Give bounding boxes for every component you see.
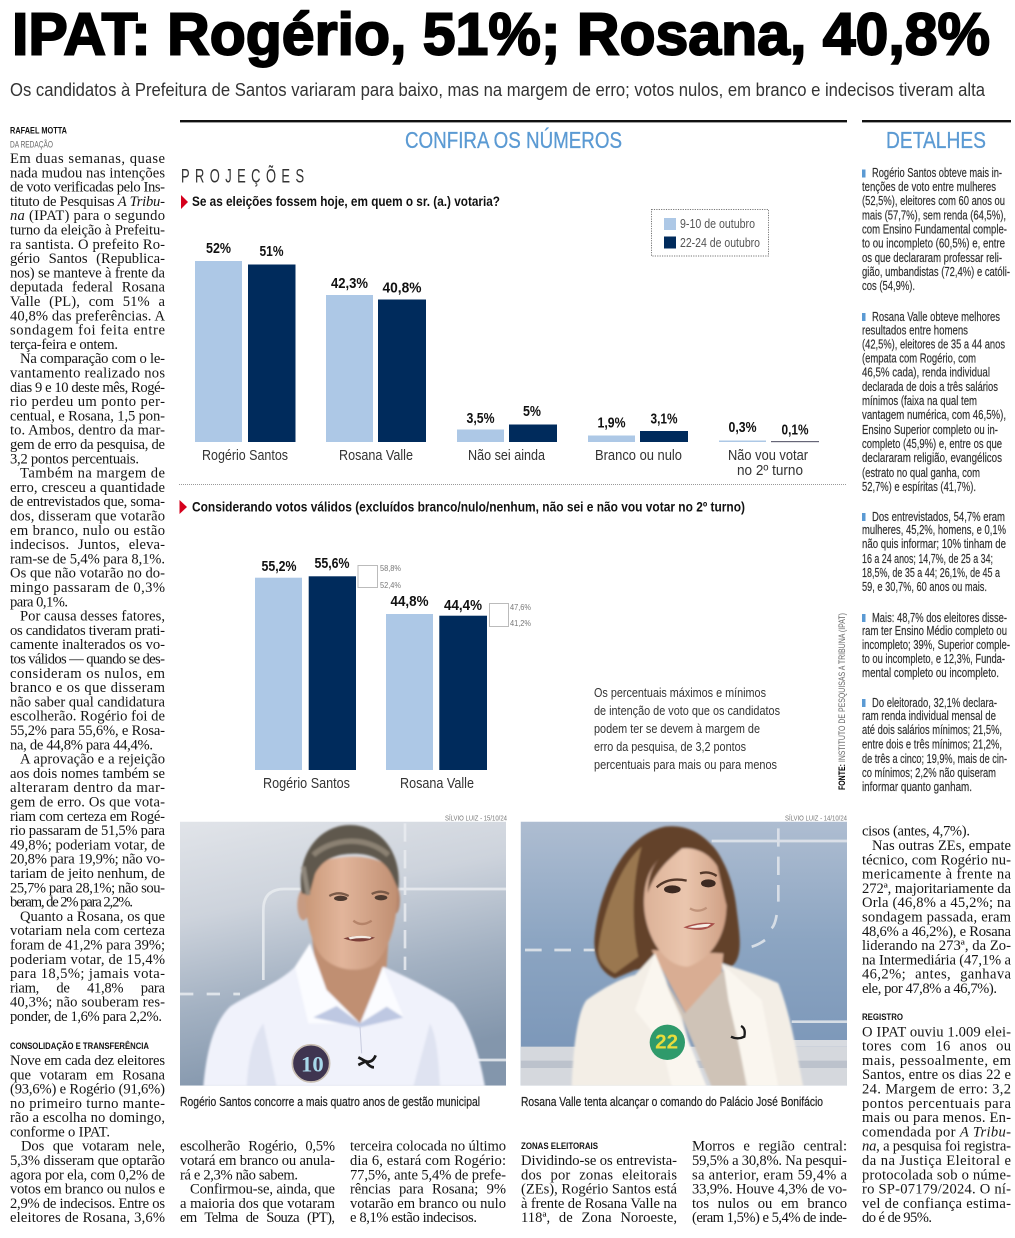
body text: opening: gério Santos (Republica- — [10, 251, 165, 267]
body text: opening: turno da eleição à Prefeitu- — [10, 222, 165, 238]
article column 4: zonas eleitorais: 118ª, de Zona Noroeste, — [521, 1210, 677, 1226]
article column 6 — [862, 824, 1012, 1226]
note on margins: de intenção de voto que os candidatos — [594, 703, 780, 718]
body text: consolidação: votos em branco ou nulos e — [10, 1182, 165, 1198]
photo: Rosana Valle: 22 — [655, 1030, 678, 1053]
body text: opening: em branco, nulo ou estão — [10, 523, 165, 539]
article column 6: liderando na 273ª, da Zo- — [862, 938, 1011, 954]
body text: opening — [10, 151, 166, 1025]
body text: opening: indecisos. Juntos, eleva- — [10, 537, 165, 553]
body text: opening: foram de 41,2% para 39%; — [10, 938, 165, 954]
photo: Rogério Santos — [180, 822, 506, 1087]
body text: opening: 40,3%; não souberam res- — [10, 995, 165, 1011]
body text: opening: beram, de 2% para 2,2%. — [10, 895, 133, 911]
article column 3: e 8,1% estão indecisos. — [350, 1210, 477, 1226]
body text: opening: sondagem foi feita entre — [10, 323, 165, 339]
article column 6: mais ou para menos. En- — [862, 1110, 1011, 1126]
article column 6: ele, por 47,8% a 46,7%). — [862, 981, 997, 997]
question 2 with red marker: Considerando votos válidos (excluídos branco/nulo/nenhum, não sei e não vou votar no 2º turno) — [192, 500, 745, 514]
byline: RAFAEL MOTTA — [10, 126, 67, 136]
article column 5: 59,5% a 30,8%. Na pesqui- — [692, 1153, 847, 1169]
bars: Não vou votar no 2º turno: 0,3% — [728, 420, 757, 436]
bars: Rosana Valle válidos: Rosana Valle — [400, 776, 474, 792]
bars: Rogério Santos válidos: 55,6% — [314, 555, 350, 572]
photo credit: Rogério: SÍLVIO LUIZ - 15/10/24 — [445, 814, 507, 822]
margin bracket: Rogério: 52,4% — [380, 581, 401, 590]
detail: Rosana: 52,7%) e espíritas (41,7%). — [862, 480, 976, 494]
article column 2: rá e 2,3% não sabem. — [180, 1167, 298, 1183]
margin bracket: Rogério — [358, 564, 401, 590]
bars: Rogério Santos válidos: Rogério Santos — [263, 776, 350, 792]
detail: Rosana: (estrato no qual ganha, com — [862, 466, 980, 480]
chart panel: votos válidos — [180, 500, 780, 792]
body text: consolidação: Nove em cada dez eleitores — [10, 1053, 165, 1069]
note on margins: erro da pesquisa, de 3,2 pontos — [594, 739, 746, 754]
article column 2: em Telma de Souza (PT), — [180, 1210, 335, 1226]
detail: renda — [862, 696, 1007, 794]
details column — [862, 166, 1010, 794]
detail: Rosana: resultados entre homens — [862, 324, 968, 338]
article column 6: Orla (46,8% a 45,2%; na — [862, 895, 1012, 911]
article column 6: comendada por A Tribu- — [862, 1124, 1011, 1140]
detail: Rosana — [862, 310, 1006, 494]
body text: opening: A aprovação e a rejeição — [20, 752, 165, 768]
body text: opening: 20,8% para 19,9%; não vo- — [10, 852, 165, 868]
photo: Rosana Valle — [521, 822, 847, 1087]
article column 6: 24. Margem de erro: 3,2 — [862, 1082, 1011, 1098]
bars: Não vou votar no 2º turno: Não vou votar — [728, 448, 808, 464]
body text: opening: riam, de 41,8% para — [10, 980, 166, 996]
body text: opening: 40,8% das preferências. A — [10, 308, 165, 324]
body text: opening: de voto verificadas pelo Ins- — [10, 180, 165, 196]
article column 6: do é de 95%. — [862, 1210, 932, 1226]
bars: Rogério Santos — [195, 241, 296, 464]
subheading: consolidação e transferência: CONSOLIDAÇÃO E TRANSFERÊNCIA — [10, 1040, 149, 1051]
section rule: números — [180, 120, 847, 122]
body text: opening: tariam de jeito nenhum, de — [10, 866, 165, 882]
bars: Branco ou nulo: 3,1% — [650, 412, 678, 428]
body text: consolidação: rão a escolha no domingo, — [10, 1110, 165, 1126]
body text: opening: ra santista. O prefeito Ro- — [10, 237, 165, 253]
margin bracket: Rosana: 41,2% — [510, 619, 531, 628]
article column 2: escolherão Rogério, 0,5% — [180, 1139, 335, 1155]
bars: Rosana Valle — [326, 276, 426, 464]
body text: opening: não saber qual candidatura — [10, 694, 166, 710]
bars: Rosana Valle: Rosana Valle — [339, 448, 413, 464]
body text: opening: rio perdeu um ponto per- — [10, 394, 165, 410]
bars: Rosana Valle válidos: 44,4% — [444, 597, 482, 614]
body text: opening: nos) se manteve à frente da — [10, 265, 166, 281]
body text: opening: na, de 44,8% para 44,4%. — [10, 737, 153, 753]
photo: Rogério Santos: 10 — [301, 1052, 324, 1077]
article column 3: votarão em branco ou nulo — [350, 1196, 506, 1212]
article column 6: vel de confiança estima- — [862, 1196, 1011, 1212]
body text: opening: terça-feira e ontem. — [10, 337, 118, 353]
bars: Branco ou nulo — [588, 412, 688, 464]
body text: opening: Na comparação com o le- — [20, 351, 165, 367]
body text: opening: mingo passaram de 0,3% — [10, 580, 165, 596]
article column 2: Confirmou-se, ainda, que — [190, 1182, 335, 1198]
heading: projeções: PROJEÇÕES — [181, 164, 304, 187]
article column 6: 46,2%; antes, ganhava — [862, 967, 1012, 983]
article column 6: Nas outras ZEs, empate — [872, 838, 1011, 854]
detail: entrevistados — [862, 510, 1006, 594]
chart panel: intenção de voto — [181, 194, 819, 479]
article column 4: zonas eleitorais: (ZEs), Rogério Santos está — [521, 1182, 678, 1198]
body text: opening: para 18,5%; jamais vota- — [10, 966, 165, 982]
body text: opening: ponder, de 1,6% para 2,2%. — [10, 1009, 162, 1025]
bars: Não sei ainda: 3,5% — [466, 411, 495, 427]
margin bracket: Rogério: 58,8% — [380, 564, 401, 573]
title: IPAT: Rogério, 51%; Rosana, 40,8% — [12, 2, 990, 68]
body text: opening: erro, cresceu a quantidade — [10, 480, 165, 496]
article column 5: sa anterior, eram 59,4% a — [692, 1167, 848, 1183]
legend — [652, 210, 768, 256]
article column 6: técnico, com Rogério nu- — [862, 852, 1011, 868]
article column 6: O IPAT ouviu 1.009 elei- — [862, 1024, 1011, 1040]
body text: opening: Quanto a Rosana, os que — [20, 909, 165, 925]
detail: Rosana: mínimos (faixa na qual tem — [862, 394, 977, 408]
article column 3: terceira colocada no último — [350, 1139, 506, 1155]
subheading: registro: REGISTRO — [862, 1012, 903, 1022]
article column 5: 33,9%. Houve 4,3% de vo- — [692, 1182, 847, 1198]
body text: opening: para 0,1%. — [10, 594, 68, 610]
body text: opening: deputada federal Rosana — [10, 280, 166, 296]
bars: Rogério Santos: 51% — [260, 244, 284, 260]
body text: opening: dos, disseram que votarão — [10, 508, 165, 524]
body text: opening: de entrevistados que, soma- — [10, 494, 165, 510]
body text: opening: aos dois nomes também se — [10, 766, 165, 782]
article column 6: na Intermediária (47,1% a — [862, 952, 1012, 968]
article column 6: na, a pesquisa foi registra- — [862, 1139, 1011, 1155]
margin bracket: Rosana — [490, 603, 531, 628]
body text: opening: Os que não votarão no do- — [10, 566, 165, 582]
article column 6: mericamente à frente na — [862, 867, 1012, 883]
body text: opening: consideram os nulos, em — [10, 666, 166, 682]
bars: Não vou votar no 2º turno: no 2º turno — [737, 463, 803, 479]
body text: opening: votariam nela com certeza — [10, 923, 166, 939]
body text: opening: Valle (PL), com 51% a — [10, 294, 166, 310]
article column 4: zonas eleitorais: à frente de Rosana Valle na — [521, 1196, 678, 1212]
detail: Rogério: cos (54,9%). — [862, 279, 915, 293]
bars: Rosana Valle válidos: 44,8% — [390, 593, 428, 610]
caption: Rogério: Rogério Santos concorre a mais quatro anos de gestão municipal — [180, 1095, 480, 1109]
heading: confira os números: CONFIRA OS NÚMEROS — [405, 127, 622, 153]
body text: opening: poderiam votar, de 15,4% — [10, 952, 165, 968]
body text: opening: to. Ambos, dentro da mar- — [10, 423, 165, 439]
question 1 with red marker: Se as eleições fossem hoje, em quem o sr. (a.) votaria? — [192, 194, 500, 209]
note on margins — [594, 685, 780, 772]
bars: Rogério Santos: 52% — [206, 241, 231, 257]
article column 4: zonas eleitorais: Dividindo-se os entrevista- — [521, 1153, 677, 1169]
body text: opening: 3,2 pontos percentuais. — [10, 451, 139, 467]
legend: 22-24 de outubro — [680, 235, 760, 250]
article column 6: mais, pessoalmente, em — [862, 1053, 1012, 1069]
body text: opening: ram-se de 5,4% para 8,1%. — [10, 551, 165, 567]
body text: opening: Também na margem de — [20, 466, 165, 482]
margin bracket: Rosana: 47,6% — [510, 603, 531, 612]
article column 6: 272ª, majoritariamente da — [862, 881, 1012, 897]
body text: opening: branco e os que disseram — [10, 680, 166, 696]
detail: Rogério — [862, 166, 1010, 293]
bars: Não sei ainda: Não sei ainda — [468, 448, 546, 464]
body text: opening: dias 9 e 10 deste mês, Rogé- — [10, 380, 165, 396]
article column 5: Morros e região central: — [692, 1139, 847, 1155]
body text: opening: Em duas semanas, quase — [10, 151, 165, 167]
bars: Rogério Santos válidos — [255, 555, 356, 792]
body text: consolidação: (93,6%) e Rogério (91,6%) — [10, 1082, 165, 1098]
body text: consolidação: que votaram em Rosana — [10, 1067, 166, 1083]
article column 2: a maioria dos que votaram — [180, 1196, 336, 1212]
body text: opening: 55,2% para 55,6%, e Rosa- — [10, 723, 165, 739]
article column 6: ro SP-07179/2024. O ní- — [862, 1182, 1011, 1198]
body text: consolidação: 5,3% disseram que optarão — [10, 1153, 165, 1169]
body text: opening: escolherão. Rogério foi de — [10, 709, 165, 725]
heading: detalhes: DETALHES — [886, 127, 986, 153]
body text: opening: 25,7% para 28,1%; não sou- — [10, 880, 165, 896]
bars: Rosana Valle: 40,8% — [382, 280, 422, 296]
detail: escolaridade — [862, 611, 1010, 680]
detail: Rosana: (empata com Rogério, com — [862, 352, 976, 366]
bars: Branco ou nulo: 1,9% — [598, 416, 626, 432]
article column 6: Santos, entre os dias 22 e — [862, 1067, 1011, 1083]
bars: Não sei ainda: 5% — [523, 404, 541, 420]
subheading: zonas eleitorais: ZONAS ELEITORAIS — [521, 1141, 598, 1151]
body text: opening: tos válidos — quando se des- — [10, 652, 165, 668]
body text: consolidação: conforme o IPAT. — [10, 1124, 110, 1140]
article column 3: dia 6, estará com Rogério: — [350, 1153, 506, 1169]
article column 4: zonas eleitorais — [521, 1141, 678, 1226]
body text: consolidação: Dos que votaram nele, — [21, 1139, 165, 1155]
body text: opening: Por causa desses fatores, — [20, 609, 165, 625]
body text: opening: nada mudou nas intenções — [10, 165, 165, 181]
byline — [10, 126, 67, 150]
note on margins: Os percentuais máximos e mínimos — [594, 685, 766, 700]
bars: Rosana Valle: 42,3% — [331, 276, 368, 292]
article column 5: tos nulos ou em branco — [692, 1196, 847, 1212]
article column 3 — [350, 1139, 506, 1226]
article column 1 — [10, 126, 166, 1226]
body text: consolidação: agora por ela, com 0,2% de — [10, 1167, 165, 1183]
detail: renda: informar quanto ganham. — [862, 780, 972, 794]
article column 6: sondagem passada, eram — [862, 910, 1012, 926]
byline: DA REDAÇÃO — [10, 140, 53, 150]
photo credit: Rosana: SÍLVIO LUIZ - 14/10/24 — [785, 814, 847, 822]
section rule: detalhes — [862, 120, 1011, 122]
article column 2: votará em branco ou anula- — [180, 1153, 335, 1169]
bars: Rosana Valle válidos — [386, 593, 487, 792]
bars: Rogério Santos válidos: 55,2% — [262, 558, 296, 575]
body text: opening: centual, e Rosana, 1,5 pon- — [10, 408, 165, 424]
article column 5: (eram 1,5%) e 5,4% de inde- — [692, 1210, 847, 1226]
body text: opening: rio passaram de 51,5% para — [10, 823, 166, 839]
article column 6: pontos percentuais para — [862, 1096, 1012, 1112]
bars: Não vou votar no 2º turno — [719, 420, 819, 479]
article column 6: tores com 16 anos ou — [862, 1039, 1012, 1055]
legend: 9-10 de outubro — [680, 216, 755, 231]
article column 6: 48,6% a 46,2%), e Rosana — [862, 924, 1012, 940]
body text: opening: 49,8%; poderiam votar, de — [10, 837, 165, 853]
caption: Rosana: Rosana Valle tenta alcançar o comando do Palácio José Bonifácio — [521, 1095, 823, 1109]
article column 2 — [180, 1139, 336, 1226]
body text: opening: gem de erro da pesquisa, de — [10, 437, 165, 453]
body text: consolidação: no primeiro turno mante- — [10, 1096, 165, 1112]
body text: opening: tituto de Pesquisas A Tribu- — [10, 194, 165, 210]
bars: Branco ou nulo: Branco ou nulo — [595, 448, 682, 464]
article column 5 — [692, 1139, 848, 1226]
body text: consolidação: eleitores de Rosana, 3,6% — [10, 1210, 165, 1226]
body text: opening: na (IPAT) para o segundo — [10, 208, 165, 224]
article column 6: cisos (antes, 4,7%). — [862, 824, 970, 840]
body text: opening: alteraram dentro da mar- — [10, 780, 165, 796]
body text: opening: gem de erro. Os que vota- — [10, 794, 165, 810]
source note: FONTE: INSTITUTO DE PESQUISAS A TRIBUNA (IPAT) — [837, 613, 848, 790]
body text: opening: os candidatos tiveram prati- — [10, 623, 165, 639]
bars: Rogério Santos: Rogério Santos — [202, 448, 288, 464]
note on margins: podem ter se devem à margem de — [594, 721, 760, 736]
article column 6: da na Justiça Eleitoral e — [862, 1153, 1011, 1169]
note on margins: percentuais para mais ou para menos — [594, 757, 777, 772]
bars: Não sei ainda — [457, 404, 557, 464]
article column 3: 77,5%, ante 5,4% de prefe- — [350, 1167, 506, 1183]
body text: consolidação: 2,9% de indecisos. Entre os — [10, 1196, 165, 1212]
body text: opening: camente inalterados os vo- — [10, 637, 165, 653]
bars: Não vou votar no 2º turno: 0,1% — [782, 422, 809, 438]
article column 3: rências para Rosana; 9% — [350, 1182, 506, 1198]
body text: opening: riam com certeza em Rogé- — [10, 809, 165, 825]
body text: opening: vantamento realizado nos — [10, 366, 165, 382]
article column 6: protocolada sob o núme- — [862, 1167, 1011, 1183]
body text: consolidação — [10, 1053, 166, 1226]
article column 4: zonas eleitorais: dos por zonas eleitorais — [521, 1167, 677, 1183]
